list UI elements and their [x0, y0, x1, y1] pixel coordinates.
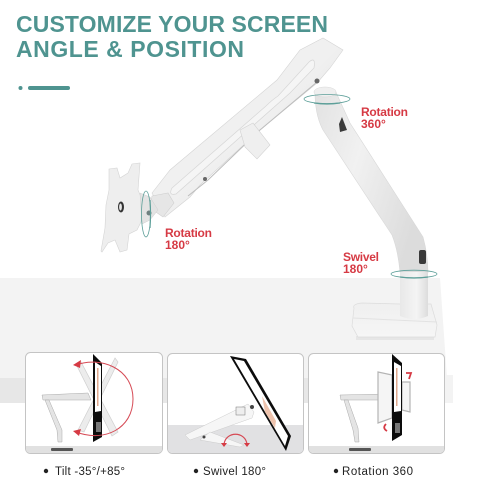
arm: column: [400, 272, 428, 319]
label: rotation 180: [165, 226, 212, 252]
floor: [168, 425, 303, 453]
caption: swivel: Swivel 180°: [203, 466, 266, 478]
arm: upper arm inset: [171, 60, 314, 194]
ghost monitors: [378, 372, 410, 423]
arm: base top plate: [353, 318, 437, 322]
arm: lower rail: [188, 82, 317, 196]
label: rotation 360: 360°: [361, 117, 386, 131]
arm: end link: [150, 193, 174, 217]
label: rotation 180: Rotation: [165, 226, 212, 240]
desk background: [0, 278, 453, 403]
arm: base shadow: [356, 336, 434, 340]
title: CUSTOMIZE YOUR SCREEN: [16, 11, 328, 37]
label: rotation 180: 180°: [165, 238, 190, 252]
arm: small screws: [203, 78, 320, 181]
title accent line: [18, 86, 70, 90]
panel: tilt: [26, 352, 162, 454]
arm: cable clip: [240, 123, 270, 159]
mini arm: [340, 394, 390, 451]
mini arm top view: [185, 404, 254, 447]
tilt arc: [76, 362, 133, 436]
caption: rotation: Rotation 360: [342, 466, 413, 478]
label: swivel 180: Swivel: [343, 250, 379, 264]
label: swivel 180: 180°: [343, 262, 368, 276]
swivel arrow: [221, 434, 250, 447]
label: rotation 360: [361, 105, 408, 131]
monitor: [392, 354, 402, 441]
arm: lower post: [315, 90, 428, 273]
details: [202, 405, 254, 438]
panel: swivel: [168, 354, 304, 454]
floor: [26, 446, 162, 453]
floor: [309, 446, 444, 453]
ghost monitors: [76, 358, 118, 436]
arm: joint top: [314, 87, 336, 97]
title: ANGLE & POSITION: [16, 36, 244, 62]
rotation ring: swivel: [391, 270, 437, 278]
monitor: [230, 356, 291, 451]
red arrows: [384, 373, 411, 431]
title: [16, 11, 328, 62]
mini arm: [42, 393, 91, 451]
arm: base: [352, 303, 437, 337]
rotation ring: top: [304, 94, 350, 104]
label: rotation 360: Rotation: [361, 105, 408, 119]
VESA plate: [101, 163, 158, 252]
panel: rotation: [308, 354, 444, 454]
arm: slots: [339, 117, 426, 264]
monitor arm: [101, 38, 437, 340]
arm: upper arm: [152, 38, 343, 217]
label: swivel 180: [343, 250, 379, 276]
caption: tilt: Tilt -35°/+85°: [55, 466, 125, 478]
monitor: [93, 354, 102, 442]
rotation ring: monitor: [142, 191, 150, 237]
